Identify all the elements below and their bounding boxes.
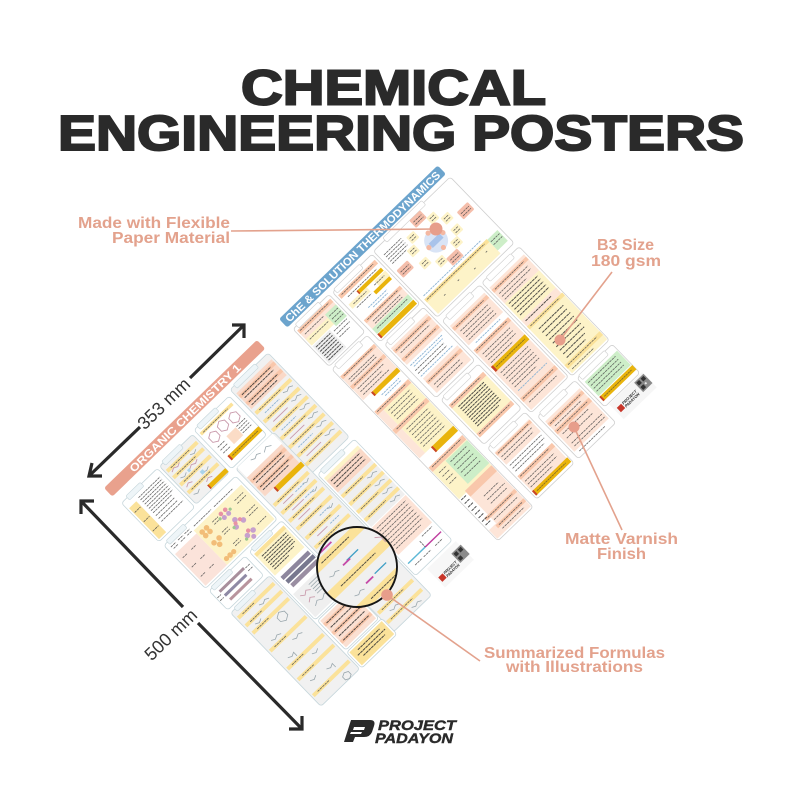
- panel: second column reactions: [236, 432, 432, 632]
- panel: functional groups list: [120, 467, 195, 542]
- dimension arrow: 500 mm: 500 mm: [140, 605, 201, 664]
- panel: green block with amber strip: [576, 343, 640, 407]
- panel: cycle diagram and table: [371, 175, 514, 317]
- panel: middle lower block with amber bar: [486, 411, 574, 499]
- panel: molecule strips: [158, 433, 229, 504]
- poster: Organic Chemistry 1: [104, 337, 475, 710]
- logo and QR strip: PADAYON: [445, 563, 461, 578]
- panel: hybrid orbital arrows: [208, 555, 264, 610]
- poster: ChE and Solution Thermodynamics: [279, 163, 657, 543]
- callout: matte varnish: [565, 422, 678, 563]
- callout: summarized formulas: with Illustrations: [505, 659, 643, 676]
- dimension arrow: 500 mm: [81, 501, 302, 729]
- title: CHEMICAL: [241, 62, 546, 116]
- panel: lower block: [536, 379, 616, 459]
- logo: Project Padayon: PROJECT: [378, 717, 458, 733]
- logo and QR strip: [427, 540, 475, 588]
- panel: long left column: [331, 334, 533, 541]
- panel: orange text block: [317, 589, 379, 650]
- panel: yellow summary strip: [347, 618, 397, 668]
- panel: right column yellow block: [481, 246, 609, 376]
- panel: long right column text: [317, 438, 452, 576]
- logo and QR strip: [609, 372, 657, 419]
- panel: orange, yellow and green block: [331, 253, 420, 342]
- callout: matte varnish: Matte Varnish: [565, 531, 678, 548]
- header bar: thermodynamics: ChE & SOLUTION THERMODYNAMICS: [283, 170, 443, 325]
- panel: orbital chart: [162, 475, 277, 589]
- panel: third column block with amber bar: [441, 284, 569, 413]
- callout: flexible paper: Paper Material: [112, 230, 230, 247]
- callout: B3 size: B3 Size: [597, 237, 654, 254]
- dimension arrow: 353 mm: 353 mm: [133, 374, 194, 433]
- panel: middle upper block: [384, 306, 475, 398]
- panel: reactions upper right: [229, 352, 349, 474]
- title: ENGINEERING POSTERS: [58, 107, 744, 161]
- panel: middle dense block: [440, 363, 521, 445]
- logo and QR strip: PROJECT: [621, 388, 638, 406]
- callout: B3 size: [554, 237, 661, 346]
- header bar: organic chemistry: [104, 340, 266, 497]
- callout: B3 size: 180 gsm: [591, 253, 661, 270]
- callout: matte varnish: Finish: [597, 546, 646, 563]
- logo and QR strip: PADAYON: [624, 392, 641, 408]
- title: [58, 62, 744, 161]
- logo: Project Padayon: PADAYON: [375, 730, 454, 746]
- logo and QR strip: PROJECT: [442, 559, 458, 575]
- callout: flexible paper: [78, 215, 442, 247]
- icon: P mark: [344, 720, 374, 742]
- panel: stereochemistry drawings: [193, 395, 267, 469]
- dimension arrow: 353 mm: [89, 325, 244, 476]
- panel: bottom molecule list: [230, 574, 360, 706]
- logo: Project Padayon: [344, 717, 458, 746]
- callout: flexible paper: Made with Flexible: [78, 215, 230, 232]
- panel: top-left block: [292, 293, 365, 366]
- header bar: organic chemistry: ORGANIC CHEMISTRY 1: [128, 362, 244, 475]
- panel: cylinder arrows block: [248, 519, 348, 620]
- callout: summarized formulas: Summarized Formulas: [484, 645, 665, 662]
- callout: summarized formulas: [381, 589, 665, 676]
- magnifier circle: [316, 526, 398, 608]
